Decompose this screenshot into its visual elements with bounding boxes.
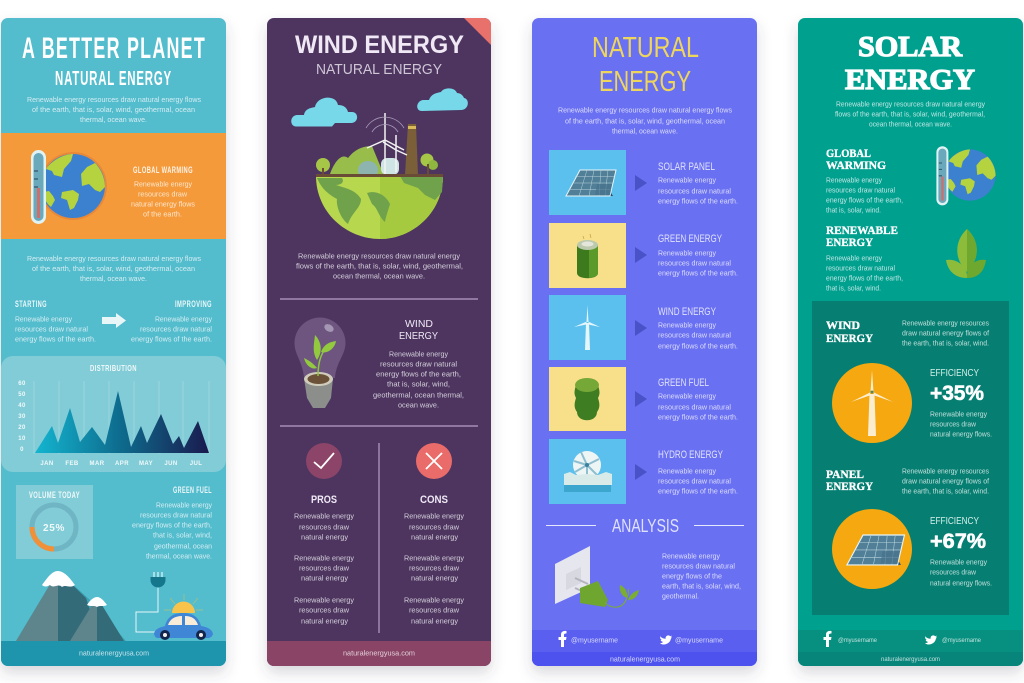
row: wind energy: resources draw natural <box>658 330 731 340</box>
section: global warming: GLOBAL <box>826 146 871 160</box>
chart: distribution <box>1 356 226 472</box>
green fuel text: geothermal, ocean <box>154 542 212 550</box>
section: renewable energy: energy flows of the earth, <box>826 274 903 282</box>
stat: efficiency +35% <box>930 368 992 438</box>
stat: efficiency +67%: Renewable energy <box>930 558 987 566</box>
starting column: STARTING <box>15 299 47 309</box>
global warming text: Renewable energy <box>134 180 192 188</box>
icon: outlet and green plug <box>555 546 639 607</box>
section: renewable energy: Renewable energy <box>826 254 882 262</box>
section: global warming: energy flows of the earth, <box>826 196 903 204</box>
starting column: resources draw natural <box>15 324 88 334</box>
green fuel text <box>132 485 212 560</box>
stat: efficiency +35%: +35% <box>930 382 984 405</box>
icon: cross <box>416 443 452 479</box>
row: green energy: resources draw natural <box>658 258 731 268</box>
green fuel text: Renewable energy <box>156 500 212 510</box>
row: hydro energy: energy flows of the earth. <box>658 486 738 496</box>
y axis labels: 50 <box>18 392 26 398</box>
footer: naturalenergyusa.com <box>343 648 415 658</box>
column: pros: resources draw <box>299 606 350 614</box>
starting column: energy flows of the earth. <box>15 334 96 344</box>
stat: efficiency +67% <box>930 516 992 588</box>
wind energy text: ocean wave. <box>398 400 439 410</box>
intro text: ocean thermal, ocean wave. <box>333 272 425 280</box>
title: natural energy: ENERGY <box>599 66 691 98</box>
row: wind energy <box>549 295 738 360</box>
wind energy text: that is, solar, wind, <box>387 380 450 388</box>
wind energy text: energy flows of the earth, <box>376 370 461 378</box>
y axis labels: 60 <box>18 381 26 387</box>
month labels: MAR <box>90 461 105 467</box>
illustration: car, sun and plug <box>136 572 213 640</box>
row: green energy: GREEN ENERGY <box>658 233 722 245</box>
panel energy text: Renewable energy resources <box>902 466 989 476</box>
section: global warming: that is, solar, wind. <box>826 206 881 214</box>
footer <box>798 652 1023 666</box>
second text block: thermal, ocean wave. <box>80 274 147 283</box>
analysis text: earth, that is, solar, wind, <box>662 582 741 590</box>
y axis labels: 40 <box>18 403 26 409</box>
second text block: of the earth, that is, solar, wind, geothermal, ocean <box>32 264 195 273</box>
row: green energy <box>549 223 738 288</box>
heading: analysis: ANALYSIS <box>612 516 679 536</box>
column: cons: Renewable energy <box>404 554 464 562</box>
social bar <box>798 630 1023 653</box>
green fuel text: that is, solar, wind, <box>153 530 212 540</box>
heading: global warming: GLOBAL WARMING <box>133 165 193 175</box>
row: wind energy: energy flows of the earth. <box>658 342 738 350</box>
wind energy text: resources draw natural <box>380 360 457 368</box>
improving column: energy flows of the earth. <box>131 334 212 344</box>
row: solar panel: energy flows of the earth. <box>658 196 738 206</box>
footer <box>1 641 226 666</box>
wind energy text: geothermal, ocean thermal, <box>373 390 464 400</box>
social bar: @myusername <box>838 638 878 644</box>
row: green energy: Renewable energy <box>658 248 716 258</box>
improving column: resources draw natural <box>140 324 212 334</box>
green fuel text: resources draw natural <box>140 510 212 520</box>
icon: twitter <box>660 635 672 644</box>
row: green fuel: Renewable energy <box>658 392 716 400</box>
icon: barrel <box>574 378 600 420</box>
intro text: Renewable energy resources draw natural energy flows <box>558 106 732 114</box>
wind energy text: draw natural energy flows of <box>902 328 989 338</box>
analysis text: geothermal. <box>662 592 699 600</box>
panel: wind energy <box>267 18 491 666</box>
social bar <box>532 630 757 653</box>
icon: leaf <box>946 229 986 278</box>
section: global warming <box>826 146 903 214</box>
icon: clouds <box>291 88 468 126</box>
icon: twitter <box>925 635 937 644</box>
section: renewable energy <box>826 223 903 292</box>
wind energy text <box>373 350 464 410</box>
y axis labels: 10 <box>18 436 26 442</box>
row: hydro energy: HYDRO ENERGY <box>658 449 723 461</box>
intro text: Renewable energy resources draw natural energy flows <box>27 95 201 104</box>
footer <box>267 641 491 666</box>
intro text: flows of the earth, that is, solar, wind, geothermal, <box>296 262 463 270</box>
y axis labels: 0 <box>20 447 24 453</box>
column: pros: resources draw <box>299 564 350 572</box>
card: volume today <box>16 485 93 559</box>
row: green fuel: resources draw natural <box>658 402 731 412</box>
intro text: thermal, ocean wave. <box>612 126 678 136</box>
arrow <box>102 313 126 328</box>
y axis labels: 30 <box>18 414 26 420</box>
column: cons: natural energy <box>411 532 458 542</box>
column: cons: resources draw <box>409 522 460 532</box>
intro text: thermal, ocean wave. <box>80 115 147 124</box>
intro text: ocean thermal, ocean wave. <box>869 120 952 128</box>
heading: wind energy: WIND <box>405 318 433 330</box>
green fuel text: thermal, ocean wave. <box>146 552 212 560</box>
social bar: @myusername <box>571 636 618 644</box>
title: a better planet: A BETTER PLANET <box>22 32 206 65</box>
intro text <box>558 106 732 136</box>
panel: a better planet <box>1 18 226 666</box>
title: natural energy <box>592 32 699 98</box>
row: solar panel: Renewable energy <box>658 176 716 184</box>
month labels: JUL <box>190 461 202 467</box>
column: cons: resources draw <box>409 564 460 572</box>
chart: distribution: DISTRIBUTION <box>90 363 137 373</box>
panel: efficiency box <box>812 301 1009 615</box>
second text block <box>27 254 201 283</box>
icon: thermometer and globe <box>936 146 996 205</box>
title: solar energy: ENERGY <box>845 64 975 96</box>
wind energy text: Renewable energy <box>389 350 448 358</box>
intro text <box>296 252 463 280</box>
second text block: Renewable energy resources draw natural energy flows <box>27 254 201 263</box>
global warming text: of the earth. <box>143 210 182 218</box>
month labels: JAN <box>40 461 54 467</box>
wind energy text: WIND <box>826 318 860 332</box>
stat: efficiency +35%: EFFICIENCY <box>930 368 979 379</box>
footer: naturalenergyusa.com <box>79 648 149 658</box>
icon: light bulb with plant <box>294 318 346 408</box>
row: hydro energy <box>549 439 738 504</box>
panel energy text: draw natural energy flows of <box>902 476 989 486</box>
column: pros: PROS <box>311 494 337 506</box>
title: solar energy <box>845 31 975 96</box>
month labels: MAY <box>139 461 153 467</box>
row: solar panel: SOLAR PANEL <box>658 161 715 173</box>
title: wind energy: WIND ENERGY <box>295 31 464 59</box>
column: cons: CONS <box>420 494 448 506</box>
stat: efficiency +35%: natural energy flows. <box>930 430 992 438</box>
row: wind energy: Renewable energy <box>658 320 716 330</box>
icon: thermometer and globe <box>31 150 107 224</box>
section: renewable energy: resources draw natural <box>826 264 895 272</box>
band: global warming <box>1 133 226 239</box>
intro text: of the earth, that is, solar, wind, geothermal, ocean <box>32 105 195 114</box>
column: pros: resources draw <box>299 522 350 532</box>
heading: wind energy: ENERGY <box>399 330 438 342</box>
icon: check <box>306 443 342 479</box>
row: solar panel: resources draw natural <box>658 186 731 196</box>
icon: facebook <box>558 631 566 647</box>
month labels <box>40 461 202 467</box>
column: cons: resources draw <box>409 606 460 614</box>
row: green energy: energy flows of the earth. <box>658 268 738 278</box>
column: pros: Renewable energy <box>294 596 354 604</box>
intro text: of the earth, that is, solar, wind, geothermal, ocean <box>565 116 725 126</box>
wind energy text: the earth, that is, solar, wind. <box>902 338 989 348</box>
column: cons: Renewable energy <box>404 512 464 520</box>
illustration: half globe with turbines <box>316 113 443 239</box>
section: global warming: Renewable energy <box>826 176 882 184</box>
section: global warming: WARMING <box>826 158 886 172</box>
section: renewable energy: that is, solar, wind. <box>826 284 881 292</box>
row: hydro energy: Renewable energy <box>658 466 716 476</box>
icon: facebook <box>824 631 832 647</box>
row: green fuel: GREEN FUEL <box>658 377 709 389</box>
social bar: @myusername <box>942 638 982 644</box>
corner ribbon <box>464 18 491 45</box>
month labels: JUN <box>164 461 178 467</box>
column: pros <box>294 443 354 626</box>
area chart <box>35 391 209 453</box>
section: global warming: resources draw natural <box>826 186 895 194</box>
stat: efficiency +67%: natural energy flows. <box>930 578 992 588</box>
row: solar panel <box>549 150 738 215</box>
section: renewable energy: ENERGY <box>826 235 873 249</box>
column: cons: Renewable energy <box>404 596 464 604</box>
improving column <box>131 299 212 344</box>
analysis text <box>662 552 741 600</box>
icon: solar panel <box>566 170 616 196</box>
footer: naturalenergyusa.com <box>881 656 940 663</box>
starting column <box>15 299 96 344</box>
illustration: mountains <box>16 571 126 641</box>
panel: natural energy <box>532 18 757 666</box>
column: pros: Renewable energy <box>294 554 354 562</box>
global warming text <box>131 180 195 218</box>
icon: turbine circle <box>832 363 912 443</box>
subtitle: natural energy: NATURAL ENERGY <box>316 62 442 78</box>
stat: efficiency +35%: resources draw <box>930 420 977 428</box>
footer: naturalenergyusa.com <box>610 654 680 664</box>
panel energy text: ENERGY <box>826 479 873 493</box>
column: pros: natural energy <box>301 574 348 582</box>
card: volume today: VOLUME TODAY <box>29 490 80 500</box>
panel: solar energy <box>798 18 1023 666</box>
y axis labels: 20 <box>18 425 26 431</box>
donut chart: 25% <box>43 523 65 534</box>
improving column: IMPROVING <box>175 299 212 309</box>
column: cons <box>404 443 464 626</box>
stat: efficiency +67%: EFFICIENCY <box>930 516 979 527</box>
analysis text: energy flows of the <box>662 572 722 580</box>
month labels: FEB <box>65 461 79 467</box>
intro text: Renewable energy resources draw natural energy <box>836 100 985 108</box>
row: wind energy: WIND ENERGY <box>658 306 716 318</box>
row: green fuel: energy flows of the earth. <box>658 412 738 422</box>
section: renewable energy: RENEWABLE <box>826 223 898 237</box>
stat: efficiency +67%: +67% <box>930 530 986 553</box>
global warming text: resources draw <box>138 190 188 198</box>
column: pros: natural energy <box>301 532 348 542</box>
stat: efficiency +67%: resources draw <box>930 568 977 576</box>
title: solar energy: SOLAR <box>858 31 963 63</box>
panel energy text: PANEL <box>826 467 864 481</box>
intro text <box>835 100 985 128</box>
column: pros: Renewable energy <box>294 512 354 520</box>
panel energy text <box>826 466 989 496</box>
footer <box>532 652 757 666</box>
green fuel text: GREEN FUEL <box>173 485 212 496</box>
green fuel text: energy flows of the earth, <box>132 520 212 530</box>
column: cons: natural energy <box>411 616 458 626</box>
wind energy text: ENERGY <box>826 331 873 345</box>
row: green fuel <box>549 367 738 431</box>
y axis labels <box>18 381 26 453</box>
column: cons: natural energy <box>411 574 458 582</box>
intro text: Renewable energy resources draw natural energy <box>298 252 460 260</box>
intro text <box>27 95 201 124</box>
intro text: flows of the earth, that is, solar, wind, geothermal, <box>835 110 985 118</box>
heading: wind energy <box>399 318 438 342</box>
improving column: Renewable energy <box>155 314 212 324</box>
wind energy text <box>826 318 989 348</box>
row: hydro energy: resources draw natural <box>658 476 731 486</box>
subtitle: natural energy: NATURAL ENERGY <box>55 68 172 90</box>
wind energy text: Renewable energy resources <box>902 318 989 328</box>
analysis text: resources draw natural <box>662 562 735 570</box>
column: pros: natural energy <box>301 616 348 626</box>
global warming text: natural energy flows <box>131 200 195 208</box>
social bar: @myusername <box>675 636 723 644</box>
analysis text: Renewable energy <box>662 552 720 560</box>
title: natural energy: NATURAL <box>592 32 699 64</box>
month labels: APR <box>115 461 129 467</box>
icon: solar panel circle <box>832 509 912 589</box>
icon: battery <box>577 234 598 278</box>
panel energy text: the earth, that is, solar, wind. <box>902 486 989 496</box>
starting column: Renewable energy <box>15 314 72 324</box>
icon: water wheel <box>564 451 612 492</box>
stat: efficiency +35%: Renewable energy <box>930 410 987 418</box>
icon: wind turbine <box>574 305 600 350</box>
